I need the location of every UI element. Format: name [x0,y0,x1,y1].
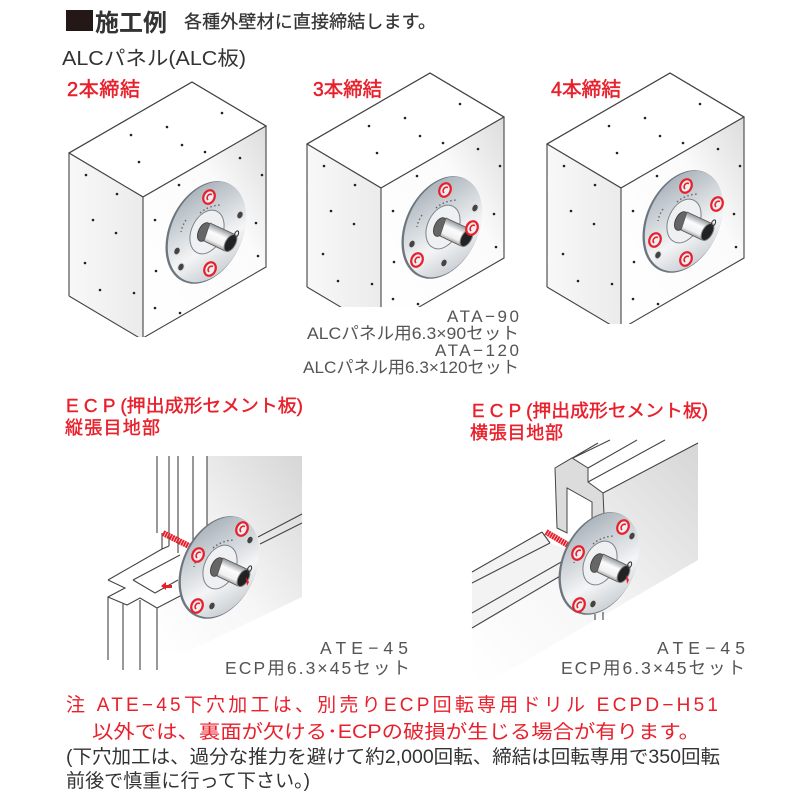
black supplementary note: (下穴加工は、過分な推力を避けて約2,000回転、締結は回転専用で350回転 [66,746,720,768]
ALC product labels: ATA−120 [435,341,519,360]
black supplementary note [66,746,720,792]
screw [163,533,191,547]
red caution note: 以外では、裏面が欠ける･ECPの破損が生じる場合が有ります。 [92,721,700,743]
label: 4 fasteners: 4本締結 [551,78,621,101]
ALC product labels: ATA−90 [447,307,519,326]
diagram: ALC block with 2 fasteners [69,82,266,340]
heading: ECP horizontal joint [470,401,708,443]
heading: ECP vertical joint [65,396,303,438]
fastener disc [627,157,739,286]
heading: ECP vertical joint: 縦張目地部 [65,418,160,438]
small arrow [161,582,172,590]
ECP product label right: ATE−45 [657,638,745,658]
ECP product label left: ATE−45 [320,638,408,658]
ALC product labels [303,307,519,377]
wall panel [157,456,302,652]
heading: ECP vertical joint: E C P (押出成形セメント板) [66,396,303,416]
diagram: ECP horizontal joint [472,440,698,680]
red caution note: 注 ATE−45下穴加工は、別売りECP回転専用ドリル ECPD−H51 [66,694,718,716]
fastener disc [543,499,655,628]
upper panel lines [557,440,698,493]
fastener disc [163,503,275,632]
ECP product label right [561,638,745,678]
ECP product label right: ECP用6.3×45セット [561,658,745,678]
diagram: ECP vertical joint [108,456,302,670]
fastener disc [386,163,498,292]
black supplementary note: 前後で慎重に行って下さい。) [66,770,310,792]
screw [546,532,573,548]
title: 施工例 [95,10,167,37]
diagram: ALC block with 4 fasteners [547,73,744,331]
lower joint [472,532,577,628]
label: 2 fasteners: 2本締結 [67,78,140,101]
subtitle: 各種外壁材に直接締結します。 [184,12,436,32]
ALC product labels: ALCパネル用6.3×120セット [303,358,519,377]
red caution note [66,694,718,743]
joint lines [108,456,302,670]
ECP product label left [225,638,410,678]
heading: ECP horizontal joint: 横張目地部 [470,423,563,443]
fastener disc [150,168,262,297]
section heading: ALC panel: ALCパネル(ALC板) [62,47,246,70]
ECP product label left: ECP用6.3×45セット [225,658,410,678]
ALC product labels: ALCパネル用6.3×90セット [307,324,519,343]
diagram: ALC block with 3 fasteners [307,73,504,331]
label: 3 fasteners: 3本締結 [313,78,382,101]
heading: ECP horizontal joint: E C P (押出成形セメント板) [472,401,708,421]
wall panel [472,443,698,680]
H section [555,458,604,533]
